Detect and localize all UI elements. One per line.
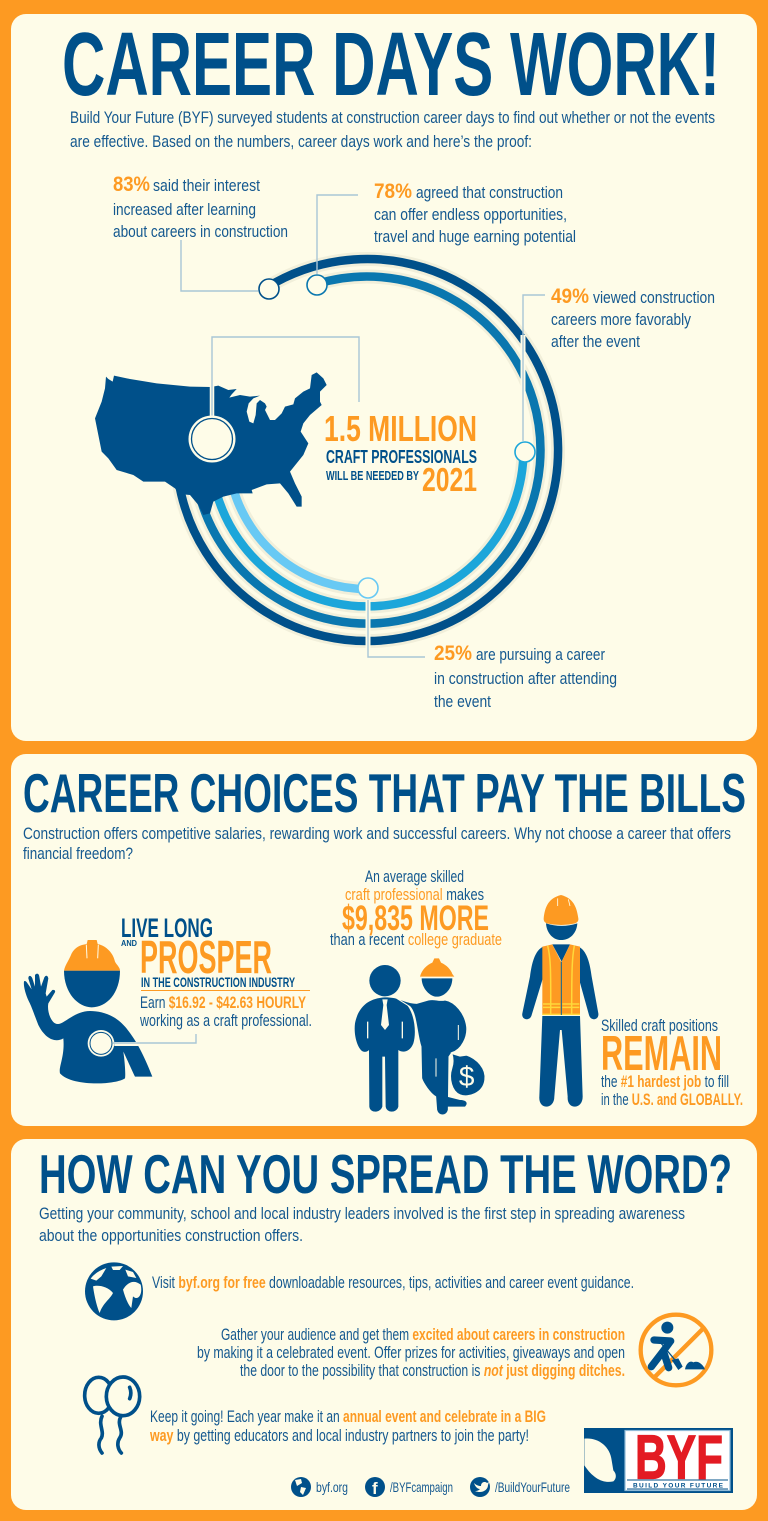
callout: 1.5 million [324,408,477,498]
stat: 49%: viewed construction [593,288,715,307]
icon: twitter [470,1477,490,1497]
step: visit byf.org: Visit byf.org for free downloadable resources, tips, activities and career event guidance. [152,1273,634,1292]
logo: BYF: BUILD YOUR FUTURE [633,1482,724,1490]
icon: businessman and worker with money bag: $ [459,1061,475,1092]
link: facebook: /BYFcampaign [390,1479,453,1495]
stat: 25%: 25% [434,642,472,665]
link: twitter: /BuildYourFuture [495,1479,570,1495]
map: United States [95,372,327,515]
stat: 25% [434,642,617,711]
icon: balloons [85,1377,140,1453]
logo: BYF: BYF [635,1424,723,1492]
callout: 1.5 million: WILL BE NEEDED BY [326,468,419,483]
step: gather your audience: Gather your audience and get them excited about careers in construction [221,1325,625,1344]
leader lines [181,195,545,657]
stat: 78%: 78% [374,180,412,203]
callout: live long and prosper: LIVE LONG [121,913,213,943]
icon: no digging [641,1315,711,1385]
callout: live long and prosper: AND [121,939,137,948]
icon: globe [85,1262,143,1320]
callout: live long and prosper: PROSPER [140,931,272,983]
icon: facebook [365,1477,385,1498]
panel: career days work [11,14,757,741]
stat: 25%: the event [434,692,491,711]
callout: live long and prosper: working as a craft professional. [139,1011,312,1030]
stat: 49% [551,285,715,351]
icon: worker in safety vest [522,895,598,1107]
logo: BYF [584,1424,733,1493]
icon: businessman and worker with money bag [355,958,485,1115]
stat: 25%: are pursuing a career [476,645,605,664]
stat: 78% [374,180,576,246]
stat: 49%: after the event [551,332,640,351]
callout: 1.5 million: CRAFT PROFESSIONALS [326,447,477,467]
callout: remain hardest job [601,1016,743,1109]
callout: $9,835 more [330,867,502,949]
callout: $9,835 more: An average skilled [365,867,464,886]
step: gather your audience [197,1325,625,1380]
step: keep it going: Keep it going! Each year make it an annual event and celebrate in a BIG [150,1407,546,1426]
stat: 78%: travel and huge earning potential [374,227,576,246]
icon: footer globe [291,1477,311,1497]
intro text: about the opportunities construction offers. [39,1226,303,1245]
callout: live long and prosper: IN THE CONSTRUCTION INDUSTRY [141,975,295,990]
callout: live long and prosper [121,913,312,1030]
intro text: financial freedom? [23,844,133,863]
ring chart [178,259,558,641]
panel: spread the word [11,1139,757,1510]
icon: facebook: f [372,1479,378,1498]
stat: 83%: increased after learning [113,200,256,219]
intro text [70,108,715,151]
stat: 78%: agreed that construction [416,183,563,202]
stat: 78%: can offer endless opportunities, [374,205,567,224]
stat: 83%: about careers in construction [113,222,288,241]
panel: career choices [11,754,757,1126]
step: keep it going [149,1407,546,1445]
stat: 83%: 83% [113,173,150,196]
callout: live long and prosper: Earn $16.92 - $42.63 HOURLY [140,993,306,1012]
stat: 83%: said their interest [153,176,260,195]
callout: remain hardest job: Skilled craft positions [601,1016,718,1035]
intro text: are effective. Based on the numbers, career days work and here’s the proof: [70,132,532,151]
callout: $9,835 more: craft professional makes [345,885,484,904]
intro text [23,824,731,863]
node markers [259,275,535,598]
intro text [39,1204,685,1245]
icon: waving worker [24,940,196,1083]
stat: 49%: 49% [551,285,589,308]
stat: 49%: careers more favorably [551,310,691,329]
step: gather your audience: the door to the possibility that construction is not just digging ditches. [240,1361,625,1380]
step: keep it going: way by getting educators and local industry partners to join the party! [149,1426,529,1445]
callout: 1.5 million: 2021 [422,461,477,498]
footer links [291,1477,570,1498]
callout: 1.5 million: 1.5 MILLION [324,408,477,449]
stat: 83% [113,173,288,241]
callout: remain hardest job: the #1 hardest job to fill [601,1072,729,1091]
callout: $9,835 more: $9,835 MORE [342,899,489,938]
link: byf.org: byf.org [316,1479,348,1495]
stat: 25%: in construction after attending [434,669,617,688]
callout: $9,835 more: than a recent college graduate [330,930,502,949]
